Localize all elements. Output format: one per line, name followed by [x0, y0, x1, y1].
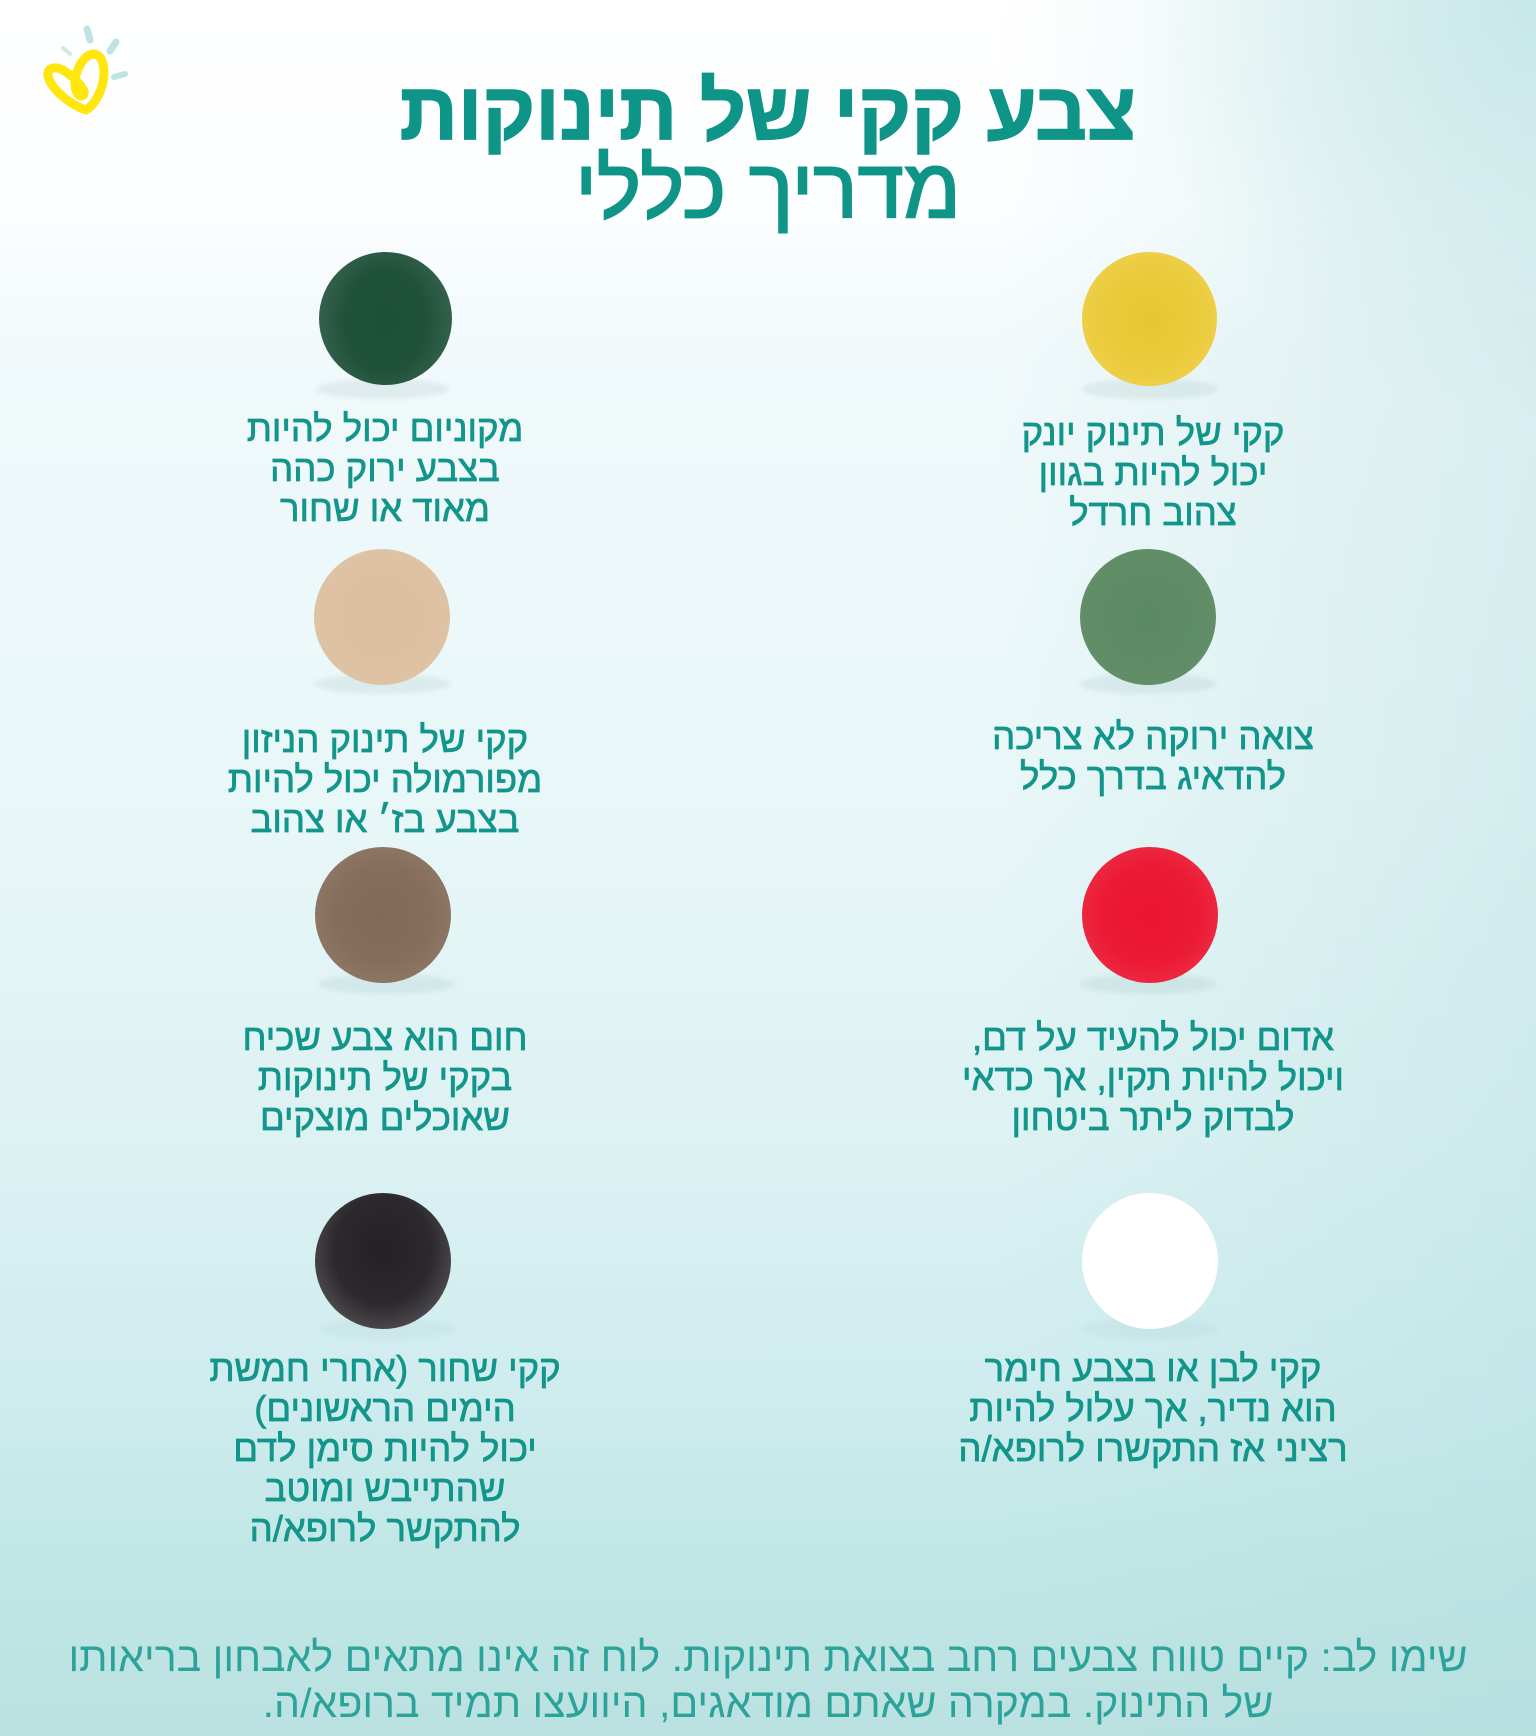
- item: green: [1080, 549, 1216, 694]
- text: dark green: מאוד או שחור: [280, 488, 490, 529]
- title: [400, 67, 1136, 235]
- item: white: [1082, 1193, 1218, 1329]
- text: black: להתקשר לרופא/ה: [250, 1508, 520, 1549]
- text: mustard yellow: צהוב חרדל: [1069, 492, 1237, 533]
- item: dark green: [317, 252, 452, 399]
- text: red: ויכול להיות תקין, אך כדאי: [962, 1057, 1344, 1098]
- footer note: של התינוק. במקרה שאתם מודאגים, היוועצו תמיד ברופא/ה.: [263, 1680, 1273, 1726]
- text: beige: [228, 719, 542, 840]
- title: מדריך כללי: [575, 142, 961, 235]
- text: beige: מפורמולה יכול להיות: [228, 759, 542, 800]
- text: red: לבדוק ליתר ביטחון: [1012, 1097, 1294, 1138]
- text: black: שהתייבש ומוטב: [265, 1468, 505, 1509]
- text: dark green: מקוניום יכול להיות: [247, 408, 523, 449]
- item: mustard yellow: [1082, 252, 1217, 399]
- text: black: [209, 1348, 561, 1549]
- text: black: הימים הראשונים): [254, 1388, 516, 1429]
- text: white: הוא נדיר, אך עלול להיות: [969, 1388, 1337, 1429]
- item: beige: [314, 549, 450, 694]
- text: brown: בקקי של תינוקות: [258, 1057, 512, 1098]
- text: mustard yellow: יכול להיות בגוון: [1039, 452, 1267, 493]
- text: white: [958, 1348, 1348, 1469]
- text: red: [962, 1017, 1344, 1138]
- text: black: קקי שחור (אחרי חמשת: [209, 1348, 561, 1389]
- footer note: שימו לב: קיים טווח צבעים רחב בצואת תינוקות. לוח זה אינו מתאים לאבחון בריאותו: [68, 1634, 1468, 1680]
- text: brown: [242, 1017, 528, 1138]
- text: red: אדום יכול להעיד על דם,: [972, 1017, 1334, 1058]
- item: red: [1082, 847, 1218, 994]
- title: צבע קקי של תינוקות: [400, 67, 1136, 157]
- text: green: [992, 716, 1314, 797]
- text: brown: שאוכלים מוצקים: [260, 1097, 510, 1138]
- text: beige: בצבע בז׳ או צהוב: [251, 799, 519, 840]
- text: dark green: [247, 408, 523, 529]
- text: green: להדאיג בדרך כלל: [1020, 756, 1286, 797]
- text: white: רציני אז התקשרו לרופא/ה: [958, 1428, 1348, 1469]
- text: white: קקי לבן או בצבע חימר: [985, 1348, 1321, 1389]
- text: mustard yellow: קקי של תינוק יונק: [1022, 412, 1284, 453]
- text: green: צואה ירוקה לא צריכה: [992, 716, 1314, 757]
- text: black: יכול להיות סימן לדם: [233, 1428, 537, 1469]
- text: dark green: בצבע ירוק כהה: [270, 448, 500, 489]
- text: brown: חום הוא צבע שכיח: [242, 1017, 528, 1058]
- item: brown: [315, 847, 454, 994]
- item: black: [315, 1193, 451, 1329]
- text: beige: קקי של תינוק הניזון: [242, 719, 528, 760]
- text: mustard yellow: [1022, 412, 1284, 533]
- footer note: [68, 1634, 1468, 1726]
- logo: yellow heart with rays: [43, 26, 128, 114]
